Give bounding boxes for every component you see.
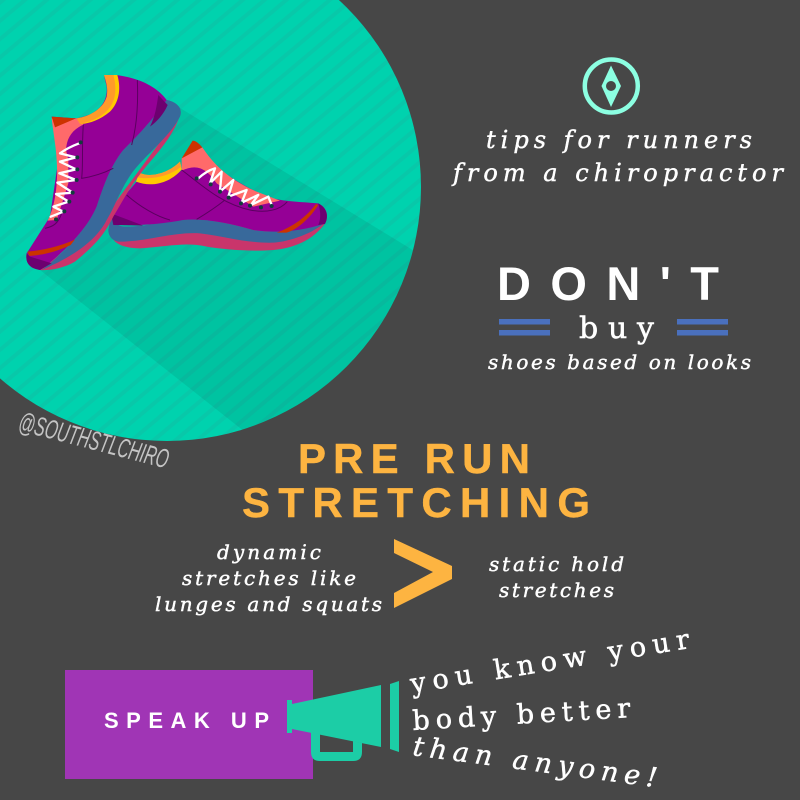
- text: you know your body: than anyone!: [411, 731, 659, 794]
- heading: pre run stretching: [242, 435, 590, 526]
- heading: don't buy: buy: [579, 311, 654, 346]
- long shadow: [40, 108, 413, 430]
- text: dynamic stretches: stretches like: [182, 566, 356, 590]
- text: static stretches: [489, 552, 624, 602]
- greater than symbol: [394, 539, 452, 608]
- text: you know your body: you know your: [407, 624, 692, 700]
- icon: compass: [585, 60, 638, 112]
- heading: don't buy: [488, 257, 751, 374]
- text: dynamic stretches: [155, 540, 382, 616]
- speak up box: [65, 670, 313, 779]
- icon: running shoes: [26, 75, 327, 270]
- text: dynamic stretches: lunges and squats: [155, 592, 382, 616]
- heading: don't buy: shoes based on looks: [488, 350, 751, 374]
- text: you know your body: [407, 624, 692, 794]
- text: static stretches: stretches: [499, 578, 614, 602]
- heading: pre run stretching: STRETCHING: [242, 479, 590, 526]
- heading: pre run stretching: PRE RUN: [298, 435, 530, 482]
- shoe: front: [108, 141, 327, 251]
- icon: megaphone: [287, 681, 399, 761]
- shoe: back: [26, 75, 181, 270]
- text: static stretches: static hold: [489, 552, 624, 576]
- title: tips for runners: [486, 126, 752, 154]
- speak up box: SPEAK UP: [104, 708, 269, 733]
- title: from a chiropractor: [451, 159, 785, 187]
- teal circle with shoes: [0, 0, 421, 441]
- title: [451, 126, 785, 187]
- text: you know your body: body better: [412, 693, 631, 737]
- handle text: @SOUTHSTLCHIRO: [15, 407, 172, 474]
- heading: don't buy: DON'T: [497, 257, 719, 310]
- text: dynamic stretches: dynamic: [217, 540, 321, 564]
